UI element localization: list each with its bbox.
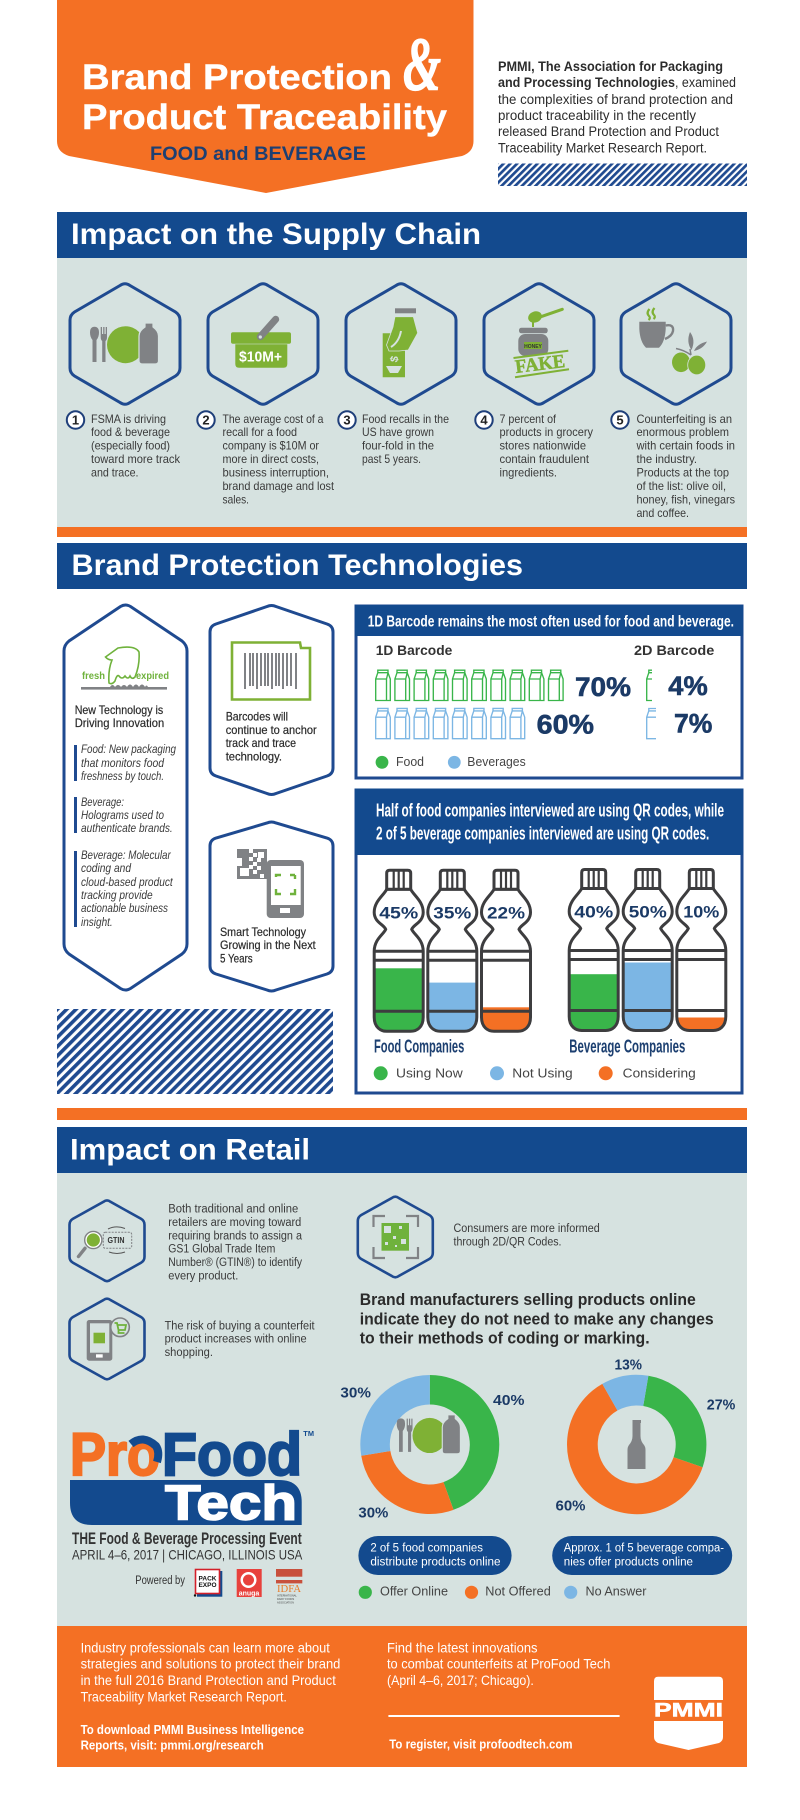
item 3 text: past 5 years. [362,452,421,466]
heading: new technology: Driving Innovation [75,716,164,730]
note: food packaging [74,742,176,783]
pictogram: food 2D partial carton [646,670,652,702]
heading: new technology: New Technology is [75,703,163,717]
item 5 text [611,411,735,520]
item 2 text: sales. [222,492,249,506]
pictogram: food 1D cartons [376,670,563,700]
donut chart: beverage companies online: 27% [707,1397,735,1413]
intro paragraph: the complexities of brand protection and [498,92,733,107]
logo: anuga [237,1569,262,1598]
icon: phone with cart hexagon [70,1299,144,1379]
icon: GTIN magnifier hexagon [70,1200,144,1281]
item 2 text: The average cost of a [222,412,324,426]
intro paragraph: PMMI, The Association for Packaging [498,59,723,74]
online shopping text [165,1320,315,1359]
item 3 hexagon and hand with money icon: $ [389,355,401,363]
item 4 hexagon and fake honey icon: HONEY [524,344,543,350]
event details: Powered by [135,1575,185,1587]
intro paragraph: product traceability in the recently [498,108,696,123]
item 2 text: business interruption, [222,466,329,480]
bottle: food considering 22 percent [481,870,531,1032]
callout: beverage companies pill [552,1536,732,1575]
icon: fresh expired touch label: fresh [82,671,105,682]
item 4 text [475,411,593,480]
bottle: food considering 22 percent: 22% [487,904,525,922]
item 1 text: toward more track [91,452,181,466]
chart header bar [355,788,743,855]
item 4 hexagon and fake honey icon: FAKE [514,351,566,378]
heading: new technology [75,703,164,730]
note: beverage molecular coding: coding and [81,861,131,875]
orange divider [57,1108,747,1120]
item 2 hexagon and basket icon [208,284,318,404]
logo: IDFA [276,1569,302,1604]
event details: THE Food & Beverage Processing Event [72,1529,302,1548]
item 2 hexagon and basket icon: $10M+ [239,349,282,366]
logo: PMMI shield: PMMI [654,1700,723,1722]
section heading: Brand Protection Technologies [72,549,523,582]
value 60 percent: 60% [537,709,594,739]
item 2 text: more in direct costs, [222,452,319,466]
item 1 text: food & beverage [91,425,170,439]
bottle: beverage using now 40 percent: 40% [574,904,614,922]
note: food packaging: Food: New packaging [81,742,176,756]
footer left text: Industry professionals can learn more about [81,1639,330,1655]
smart technology text: Smart Technology [220,925,306,939]
subtitle: FOOD and BEVERAGE [150,144,366,165]
barcodes text: continue to anchor [226,723,317,737]
item 4 text: products in grocery [500,425,593,439]
footer right text: Find the latest innovations [387,1639,538,1655]
label: food companies: Food Companies [374,1037,464,1057]
icon: barcode label [232,642,310,700]
QR informed text: Consumers are more informed [454,1223,600,1235]
legend: offer online, not offered, no answer: Offer Online [380,1584,448,1599]
GTIN text: GS1 Global Trade Item [168,1244,275,1256]
item 3 text: Food recalls in the [362,412,449,426]
item 2 text: recall for a food [222,425,297,439]
item 1 text: FSMA is driving [91,412,166,426]
note: beverage molecular coding: tracking provide [81,888,153,902]
smart technology text [220,925,316,966]
column label 2D: 2D Barcode [634,642,715,658]
logo: Pack Expo: PACK [199,1576,217,1582]
note: beverage holograms: Holograms used to [81,808,164,822]
GTIN text: every product. [168,1270,238,1282]
legend: using now, not using, considering [374,1066,696,1081]
item 4 hexagon and fake honey icon [484,284,594,404]
icon: QR scan hexagon [358,1197,433,1277]
note: beverage molecular coding: actionable business [81,901,168,915]
logo: ProFood Tech: Pro [70,1421,160,1488]
banner shape [57,0,474,193]
donut chart: food companies online [340,1385,525,1521]
pictogram: beverage 2D partial carton [646,708,656,740]
logo: anuga: anuga [239,1590,259,1598]
donut chart: beverage companies online [556,1357,735,1515]
footer right text: (April 4–6, 2017; Chicago). [387,1672,534,1688]
note: food packaging: freshness by touch. [81,769,164,783]
item 5 text: with certain foods in [636,438,735,452]
heading: brand manufacturers [360,1291,714,1347]
title [82,58,448,137]
heading: brand manufacturers: Brand manufacturers selling products online [360,1291,696,1309]
legend: food and beverages: Beverages [467,754,526,769]
item 5 text: 5 [616,412,624,428]
section: impact on the supply chain [57,212,747,537]
value 70 percent: 70% [575,672,631,702]
item 5 text: honey, fish, vinegars [636,492,735,506]
legend: using now, not using, considering: Using Now [396,1066,463,1081]
section header bar [57,212,747,258]
value 4 percent: 4% [668,671,708,701]
logo: IDFA: DAIRY FOODS [277,1598,294,1601]
GTIN text: Both traditional and online [168,1204,298,1216]
logo: PMMI shield [654,1677,723,1750]
item 4 text: 4 [480,412,488,428]
donut chart: beverage companies online: 60% [556,1499,586,1515]
icon: GTIN magnifier hexagon: GTIN [108,1236,125,1245]
value 7 percent: 7% [674,709,712,739]
bottle: food using now 45 percent: 45% [379,904,419,922]
heading: brand manufacturers: to their methods of coding or marking. [360,1329,650,1347]
footer right text: To register, visit profoodtech.com [389,1738,572,1752]
bottle: beverage not using 50 percent: 50% [629,904,667,922]
item 5 text: enormous problem [636,425,729,439]
item 4 text: stores nationwide [500,438,586,452]
item 2 text: company is $10M or [222,438,319,452]
section: brand protection technologies [57,543,747,1120]
note: beverage holograms: authenticate brands. [81,821,173,835]
barcodes text: track and trace [226,736,296,750]
note: food packaging: that monitors food [81,756,164,770]
GTIN text: retailers are moving toward [168,1217,301,1229]
online shopping text: product increases with online [165,1334,307,1346]
donut chart: food companies online: 30% [340,1385,371,1401]
logo: ProFood Tech: Food [162,1421,302,1488]
section heading: Impact on Retail [70,1133,310,1166]
chart heading [376,801,724,843]
donut chart: food companies online: 40% [493,1393,525,1409]
bottle: beverage considering 10 percent [676,870,726,1032]
callout: food companies pill: distribute products online [370,1557,500,1569]
logo: Pack Expo: EXPO [198,1582,217,1589]
donut chart: food companies online: 30% [358,1505,389,1521]
section heading: Impact on the Supply Chain [71,218,481,251]
legend: food and beverages [376,754,526,769]
note: beverage holograms [74,795,173,835]
GTIN text: Number® (GTIN®) to identify [168,1257,302,1269]
heading: brand manufacturers: indicate they do not need to make any changes [360,1310,714,1328]
intro paragraph [498,59,736,156]
icon: fresh expired touch label: expired [136,671,169,682]
orange divider [57,527,747,537]
event details: APRIL 4–6, 2017 | CHICAGO, ILLINOIS USA [72,1546,303,1562]
panel: new technology hexagon [64,605,187,990]
section panel [57,1173,747,1626]
chart header bar [355,605,743,636]
note: beverage molecular coding: insight. [81,915,113,929]
section panel [57,258,747,527]
barcodes text: Barcodes will [226,710,288,724]
item 2 text: brand damage and lost [222,479,335,493]
header banner [57,0,474,193]
event details [72,1529,303,1587]
intro paragraph: released Brand Protection and Product [498,124,719,139]
section: impact on retail [57,1127,747,1626]
logo: IDFA: IDFA [277,1583,301,1595]
item 3 text [338,411,449,466]
item 1 hexagon and icon [70,284,180,404]
label: beverage companies: Beverage Companies [569,1037,685,1057]
item 3 hexagon and hand with money icon [346,284,456,404]
legend: food and beverages: Food [396,754,424,769]
bottle: beverage considering 10 percent: 10% [683,904,720,922]
bottle: food not using 35 percent [427,870,477,1033]
item 2 text: 2 [202,412,210,428]
title: Product Traceability [82,98,448,137]
footer left text: Reports, visit: pmmi.org/research [81,1738,264,1752]
item 3 text: US have grown [362,425,434,439]
footer right text: to combat counterfeits at ProFood Tech [387,1656,610,1672]
QR informed text [454,1223,600,1248]
note: beverage molecular coding: cloud-based product [81,875,173,889]
logo: ProFood Tech: TM [303,1429,314,1438]
item 1 text: 1 [72,412,79,428]
online shopping text: The risk of buying a counterfeit [165,1320,315,1332]
intro paragraph: , examined [675,75,736,90]
logo: IDFA: INTERNATIONAL [277,1594,297,1598]
item 1 text [67,411,181,480]
footer right text [387,1639,620,1752]
item 4 text: ingredients. [500,466,557,480]
online shopping text: shopping. [165,1347,213,1359]
footer left text [81,1639,340,1752]
item 5 text: and coffee. [636,506,689,520]
legend: offer online, not offered, no answer: No Answer [586,1584,647,1599]
donut chart: beverage companies online: 13% [614,1357,642,1373]
ampersand: & [403,23,441,107]
barcodes text: technology. [226,750,282,764]
panel: barcodes hexagon [210,606,333,794]
footer left text: To download PMMI Business Intelligence [81,1723,304,1737]
icon: fresh expired touch label [81,647,169,690]
title: Brand Protection [82,58,392,97]
hatch block [57,1009,333,1094]
section header bar [57,543,747,589]
item 5 hexagon and coffee with olives icon [621,284,731,404]
note: beverage molecular coding [74,848,173,929]
QR informed text: through 2D/QR Codes. [454,1236,562,1248]
callout: beverage companies pill: Approx. 1 of 5 beverage compa- [564,1543,724,1555]
footer left text: in the full 2016 Brand Protection and Product [81,1672,336,1688]
section header bar [57,1127,747,1173]
logo: IDFA: ASSOCIATION [277,1602,294,1604]
bottle: beverage using now 40 percent [569,870,619,1032]
item 3 text: 3 [343,412,351,428]
item 5 text: Counterfeiting is an [636,412,732,426]
barcodes text [226,710,317,764]
GTIN text [168,1204,303,1282]
intro paragraph: Traceability Market Research Report. [498,140,707,156]
icon: qr code and phone [237,849,304,918]
item 5 text: of the list: olive oil, [636,479,726,493]
note: beverage holograms: Beverage: [81,795,124,809]
item 4 text: 7 percent of [500,412,557,426]
item 5 text: Products at the top [636,466,729,480]
footer left text: Traceability Market Research Report. [81,1688,287,1704]
chart panel: 1D and 2D barcode use [355,605,743,778]
bottle: food not using 35 percent: 35% [433,904,472,922]
column label 1D: 1D Barcode [376,642,453,658]
item 2 text [197,411,335,506]
hatch band top [498,164,747,186]
callout: food companies pill: 2 of 5 food companies [370,1543,483,1555]
logo: ProFood Tech [70,1421,314,1530]
footer left text: strategies and solutions to protect their brand [81,1656,340,1672]
intro paragraph: and Processing Technologies [498,75,675,90]
bottle: food using now 45 percent [374,870,424,1032]
logo: Pack Expo [194,1570,222,1597]
legend: using now, not using, considering: Not Using [512,1066,573,1081]
bottle: beverage not using 50 percent [623,870,673,1032]
item 1 text: (especially food) [91,438,170,452]
smart technology text: 5 Years [220,952,253,966]
smart technology text: Growing in the Next [220,938,316,952]
legend: offer online, not offered, no answer: Not Offered [485,1584,551,1599]
logo: ProFood Tech: Tech [165,1476,297,1530]
pictogram: beverage 1D cartons [376,708,525,739]
callout: food companies pill [358,1536,512,1575]
item 4 text: contain fraudulent [500,452,590,466]
legend: using now, not using, considering: Considering [623,1066,696,1081]
GTIN text: requiring brands to assign a [168,1230,303,1242]
item 5 text: the industry. [636,452,697,466]
callout: beverage companies pill: nies offer products online [564,1557,693,1569]
item 1 text: and trace. [91,466,138,480]
note: beverage molecular coding: Beverage: Molecular [81,848,172,862]
panel: smart technology hexagon [210,822,333,991]
item 3 text: four-fold in the [362,438,434,452]
footer panel [57,1626,747,1767]
legend: offer online, not offered, no answer [359,1584,647,1599]
chart panel: QR code use [355,788,743,1093]
